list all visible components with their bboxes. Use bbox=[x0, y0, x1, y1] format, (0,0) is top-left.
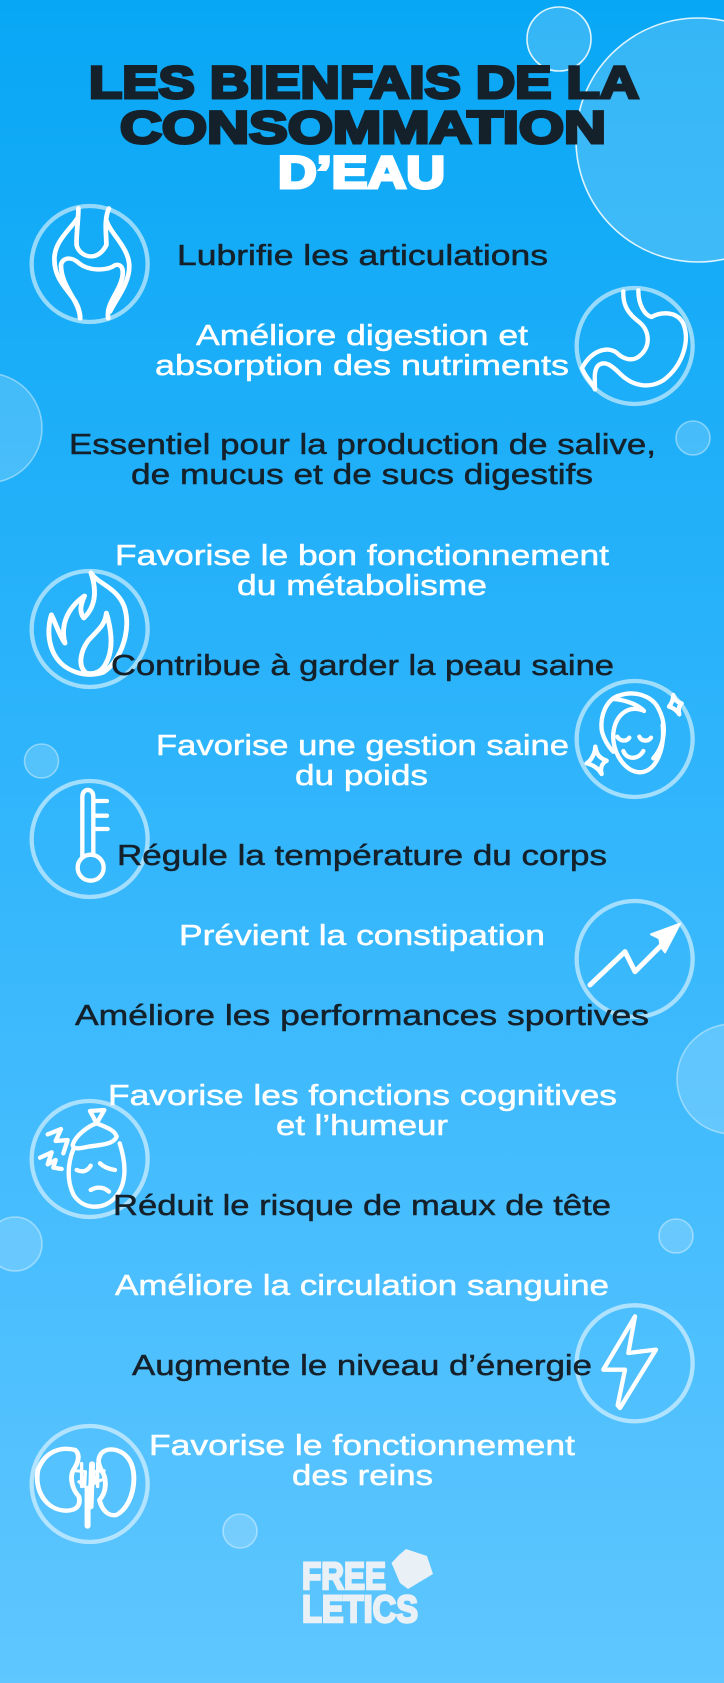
title: LES BIENFAIS DE LA bbox=[89, 57, 639, 108]
text: digestion: Améliore digestion et bbox=[196, 320, 528, 352]
text: metabolisme: du métabolisme bbox=[237, 570, 487, 602]
text: salive: de mucus et de sucs digestifs bbox=[131, 459, 593, 491]
text: peau: Contribue à garder la peau saine bbox=[111, 650, 614, 682]
text: reins: des reins bbox=[292, 1460, 433, 1492]
icon: rising arrow bbox=[577, 901, 693, 1017]
title: D’EAU bbox=[278, 147, 445, 198]
icon: headache bbox=[32, 1101, 148, 1217]
text: salive bbox=[69, 429, 656, 491]
logo: Freeletics: FREE bbox=[302, 1556, 386, 1598]
icon: stomach bbox=[577, 288, 693, 404]
text: poids: du poids bbox=[295, 760, 428, 792]
text: digestion: absorption des nutriments bbox=[155, 350, 569, 382]
logo: Freeletics bbox=[302, 1549, 433, 1631]
text: constipation: Prévient la constipation bbox=[179, 920, 545, 952]
text: salive: Essentiel pour la production de salive, bbox=[69, 429, 656, 461]
icon: flame bbox=[32, 571, 148, 687]
title bbox=[89, 57, 639, 198]
icon: lightning bolt bbox=[577, 1305, 693, 1421]
text: circulation: Améliore la circulation sanguine bbox=[115, 1270, 609, 1302]
icon: kidneys bbox=[32, 1426, 148, 1542]
text: digestion bbox=[155, 320, 569, 382]
text: performances: Améliore les performances sportives bbox=[75, 1000, 649, 1032]
logo: Freeletics: LETICS bbox=[302, 1589, 418, 1631]
text: cognitives: Favorise les fonctions cognitives bbox=[108, 1080, 617, 1112]
text: poids bbox=[156, 730, 569, 792]
text: reins bbox=[149, 1430, 575, 1492]
text: cognitives: et l’humeur bbox=[276, 1110, 448, 1142]
text: poids: Favorise une gestion saine bbox=[156, 730, 569, 762]
icon: joint bbox=[32, 206, 148, 322]
icon: face care bbox=[577, 681, 693, 797]
text: cognitives bbox=[108, 1080, 617, 1142]
text: energie: Augmente le niveau d’énergie bbox=[132, 1350, 592, 1382]
text: metabolisme: Favorise le bon fonctionnement bbox=[115, 540, 609, 572]
title: CONSOMMATION bbox=[120, 102, 606, 153]
icon: thermometer bbox=[32, 781, 148, 897]
text: temperature: Régule la température du corps bbox=[117, 840, 607, 872]
text: reins: Favorise le fonctionnement bbox=[149, 1430, 575, 1462]
text: lubrifie: Lubrifie les articulations bbox=[177, 240, 548, 272]
text: metabolisme bbox=[115, 540, 609, 602]
text: maux de tete: Réduit le risque de maux de tête bbox=[113, 1190, 611, 1222]
